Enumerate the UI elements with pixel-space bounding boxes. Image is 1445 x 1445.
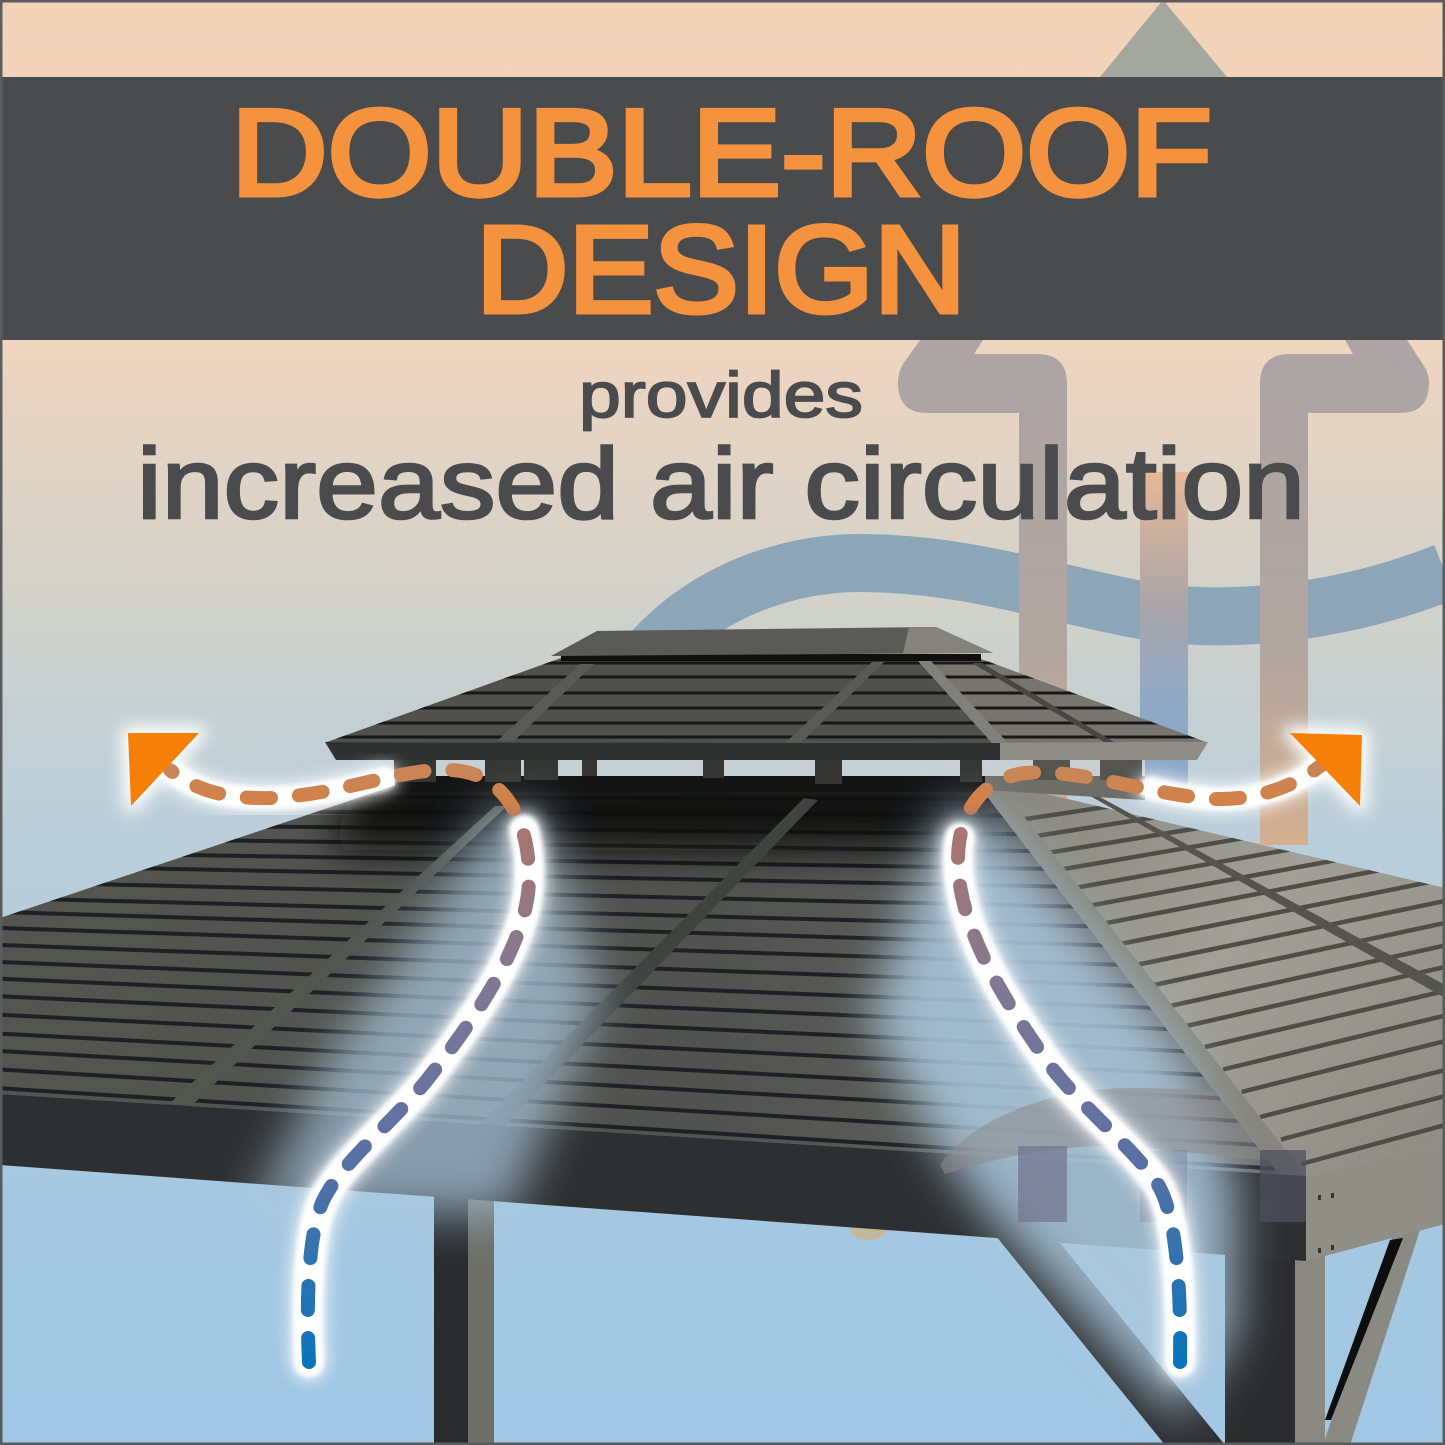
ridge lines: front face — [0, 796, 1306, 1171]
roof top shadow — [330, 770, 1010, 850]
arrowhead — [128, 733, 199, 806]
roof rib right face — [1085, 793, 1445, 998]
subtitle: provides: provides — [579, 359, 863, 431]
centre warm to cool column — [1140, 472, 1188, 792]
inner diagonal brace — [996, 1236, 1225, 1445]
beige finial — [850, 1220, 886, 1240]
light airflow glow: right — [870, 810, 1235, 1420]
ghost airflow columns under roof — [1018, 1146, 1306, 1222]
upper roof panel: right — [918, 657, 1206, 743]
airflow arrow: left — [128, 733, 529, 1362]
title line 1: DOUBLE-ROOF — [231, 85, 1212, 222]
ghost airflow arc behind roof — [940, 1088, 1270, 1174]
airflow arrow: right — [958, 733, 1362, 1362]
blue wave lower section — [651, 720, 694, 790]
roof panel: right face — [985, 783, 1445, 1176]
background airflow graphic — [630, 0, 1445, 860]
roof rib left — [168, 806, 507, 1107]
vent supports and gap — [394, 758, 1145, 800]
roof panel: front face — [0, 782, 1306, 1176]
outer side brace — [1323, 1230, 1420, 1445]
roof cap — [551, 627, 993, 661]
upper roof ribs — [497, 660, 1114, 743]
right side fascia — [1306, 1142, 1445, 1261]
roof rib centre — [478, 798, 818, 1128]
left rising arrow — [898, 340, 1067, 860]
blue wave airflow — [630, 563, 1445, 680]
icon: top airflow arrow tip — [1100, 0, 1227, 77]
ridge lines: right face — [1024, 806, 1442, 1166]
gazebo posts and braces — [434, 1190, 1420, 1445]
bolts on fascia — [1318, 1193, 1334, 1253]
subtitle: increased air circulation: increased air circulation — [137, 428, 1305, 540]
title line 2: DESIGN — [476, 202, 966, 339]
hip ridge — [982, 786, 1306, 1176]
upper roof panel: front — [327, 658, 1000, 743]
lower roof — [0, 756, 1445, 1261]
dashed path: air flow — [958, 758, 1330, 1362]
title band — [0, 77, 1445, 340]
glow halo — [128, 733, 529, 1362]
upper roof — [300, 627, 1230, 800]
upper roof fascia — [325, 742, 1208, 760]
upper roof ridge lines — [300, 663, 1230, 737]
corner post — [1225, 1250, 1325, 1445]
right rising arrow — [1260, 340, 1429, 845]
arrowhead — [1290, 733, 1362, 806]
glow halo — [958, 733, 1362, 1362]
front eave fascia — [0, 1094, 1306, 1261]
light airflow glow: left — [250, 810, 600, 1215]
dashed path: air flow — [170, 770, 529, 1362]
left post — [434, 1190, 494, 1445]
